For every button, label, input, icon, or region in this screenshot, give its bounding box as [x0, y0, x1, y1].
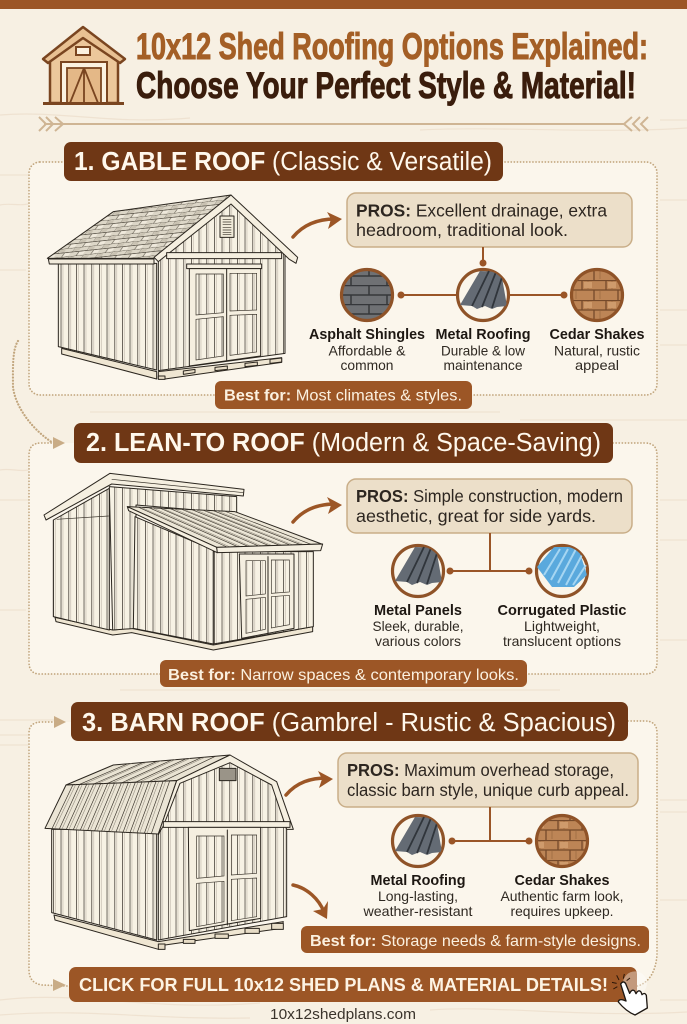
pros box: PROS: Excellent drainage, extra [356, 200, 607, 220]
swatch: metal roofing [458, 270, 508, 320]
swatch: metal panels [392, 546, 444, 596]
material: cedar: appeal [575, 357, 619, 373]
material: metal panels [372, 603, 464, 649]
call to action button [53, 967, 637, 1002]
section 3 arrowhead [54, 716, 66, 728]
material: metal panels: various colors [375, 633, 461, 649]
section 2 arrowhead [53, 437, 65, 449]
material: cedar shakes: Authentic farm look, [500, 888, 624, 904]
pros box: aesthetic, great for side yards. [356, 506, 596, 526]
connectors [448, 807, 532, 844]
icon: pointer hand [612, 971, 647, 1015]
swatch: cedar shakes [572, 270, 622, 320]
material: asphalt: common [340, 357, 394, 373]
illustration: lean-to shed [44, 473, 323, 650]
pros box [347, 193, 632, 247]
title [136, 26, 648, 106]
material: metal panels: Sleek, durable, [372, 618, 464, 634]
swatch: cedar shakes [536, 816, 588, 866]
best for: gable [215, 381, 472, 409]
heading: barn: 3. BARN ROOF (Gambrel - Rustic & Spacious) [82, 709, 616, 737]
material: asphalt [309, 327, 425, 373]
pros box [338, 753, 638, 807]
swatch: corrugated plastic [536, 546, 588, 596]
heading: gable: 1. GABLE ROOF (Classic & Versatile) [74, 148, 492, 176]
material: metal roofing: weather-resistant [362, 903, 473, 919]
best for: barn: Best for: Storage needs & farm-style designs. [310, 933, 641, 950]
heading: lean-to: 2. LEAN-TO ROOF (Modern & Space-Saving) [86, 429, 601, 457]
material: cedar shakes: Cedar Shakes [514, 873, 610, 889]
heading: gable [64, 142, 503, 181]
heading: barn [71, 702, 628, 741]
material: cedar [550, 327, 644, 373]
material: metal: maintenance [444, 357, 523, 373]
pros box: classic barn style, unique curb appeal. [347, 780, 629, 800]
heading: lean-to [74, 423, 613, 463]
connectors [398, 247, 568, 298]
best for: barn [301, 926, 649, 953]
pros box: PROS: Maximum overhead storage, [347, 760, 614, 780]
pros box [347, 479, 632, 533]
best for: gable: Best for: Most climates & styles. [224, 388, 462, 404]
material: cedar: Cedar Shakes [550, 327, 644, 343]
best for: lean-to [160, 660, 527, 687]
material: corrugated plastic: translucent options [503, 633, 621, 649]
material: corrugated plastic [498, 603, 626, 649]
arrow to pros [293, 212, 342, 237]
panel: barn roof [29, 702, 657, 986]
material: metal panels: Metal Panels [374, 603, 462, 619]
panel: lean-to roof [29, 423, 657, 687]
illustration: barn shed [45, 755, 293, 949]
swatch: metal roofing [392, 816, 444, 866]
arrow to pros [293, 497, 342, 522]
top bar [0, 0, 687, 9]
material: metal roofing: Metal Roofing [370, 873, 466, 889]
material: metal [436, 327, 530, 373]
material: corrugated plastic: Corrugated Plastic [498, 603, 626, 619]
arrow to best for [293, 885, 328, 919]
panel: gable roof [29, 142, 657, 409]
arrow to pros [286, 771, 333, 795]
illustration: gable shed [47, 195, 298, 379]
material: cedar: Natural, rustic [554, 342, 640, 358]
footer url: 10x12shedplans.com [270, 1006, 416, 1023]
material: metal roofing: Long-lasting, [378, 888, 458, 904]
best for: lean-to: Best for: Narrow spaces & contemporary looks. [168, 667, 519, 684]
swatch: asphalt shingles [342, 270, 392, 320]
material: asphalt: Affordable & [328, 342, 406, 358]
material: metal: Metal Roofing [436, 327, 530, 343]
material: cedar shakes [500, 873, 624, 919]
pros box: PROS: Simple construction, modern [356, 486, 623, 506]
icon: shed logo [43, 27, 125, 104]
material: metal: Durable & low [441, 342, 526, 358]
connector arrow: section 1 to 2 [13, 341, 53, 443]
connectors [446, 533, 532, 574]
material: corrugated plastic: Lightweight, [524, 618, 600, 634]
material: metal roofing [362, 873, 473, 919]
material: asphalt: Asphalt Shingles [309, 327, 425, 343]
pros box: headroom, traditional look. [356, 220, 568, 240]
divider with arrows [39, 117, 648, 131]
call to action button: CLICK FOR FULL 10x12 SHED PLANS & MATERIAL DETAILS! [79, 974, 608, 995]
material: cedar shakes: requires upkeep. [510, 903, 614, 919]
